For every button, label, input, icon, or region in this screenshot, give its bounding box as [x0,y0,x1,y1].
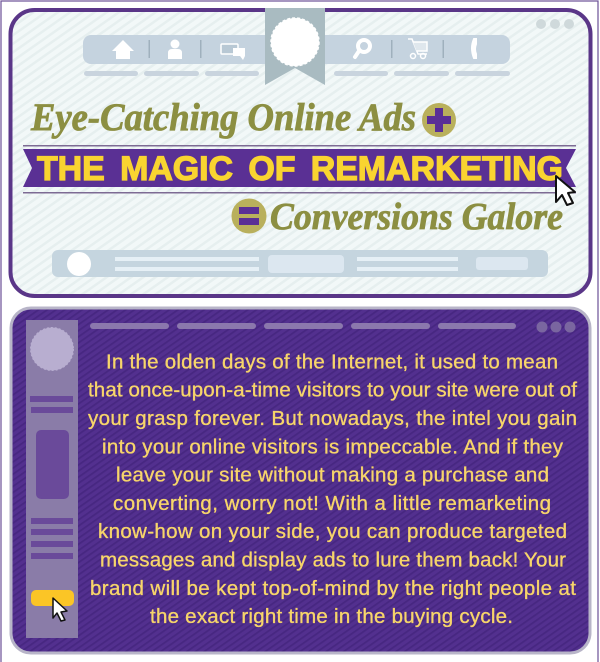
icon: cart [408,39,427,58]
body text: that once-upon-a-time visitors to your site were out of [88,379,577,402]
icon: cursor [556,176,575,205]
body text: into your online visitors is impeccable. And if they [102,435,564,458]
heading: Conversions Galore: Conversions Galore [270,196,563,238]
navigation bar [83,35,510,64]
body text: brand will be kept top-of-mind by the right people at [90,577,576,600]
sidebar [26,320,78,638]
icon: phone [472,39,476,58]
nav sub bars [84,71,510,76]
panel: purple browser window [11,308,590,653]
body text [88,350,577,628]
body text: know-how on your side, you can produce targeted [98,520,567,543]
top bars [90,323,516,329]
body text: leave your site without making a purchase and [116,464,549,487]
bookmark badge [271,18,319,66]
heading: Eye-Catching Online Ads: Eye-Catching Online Ads [30,96,416,139]
button [31,590,74,606]
icon: equals [232,198,266,234]
icon: plus [422,103,456,137]
footer bar [52,250,548,277]
nav separators [148,40,444,58]
bookmark ribbon [265,8,325,85]
icon: user [168,40,182,59]
banner [23,145,576,194]
body text: converting, worry not! With a little remarketing [113,492,551,515]
body text: messages and display ads to lure them back! Your [100,548,566,572]
body text: the exact right time in the buying cycle. [150,605,513,628]
panel: header browser window [10,8,590,296]
banner heading: THE MAGIC OF REMARKETING [37,150,563,188]
icon: cursor [53,598,67,621]
body text: In the olden days of the Internet, it used to mean [106,350,558,373]
icon: search [355,40,370,57]
window dots [536,322,576,332]
icon: home [112,40,134,59]
body text: your grasp forever. But nowadays, the intel you gain [88,407,577,430]
window dots [536,19,574,29]
icon: chat [221,44,245,60]
